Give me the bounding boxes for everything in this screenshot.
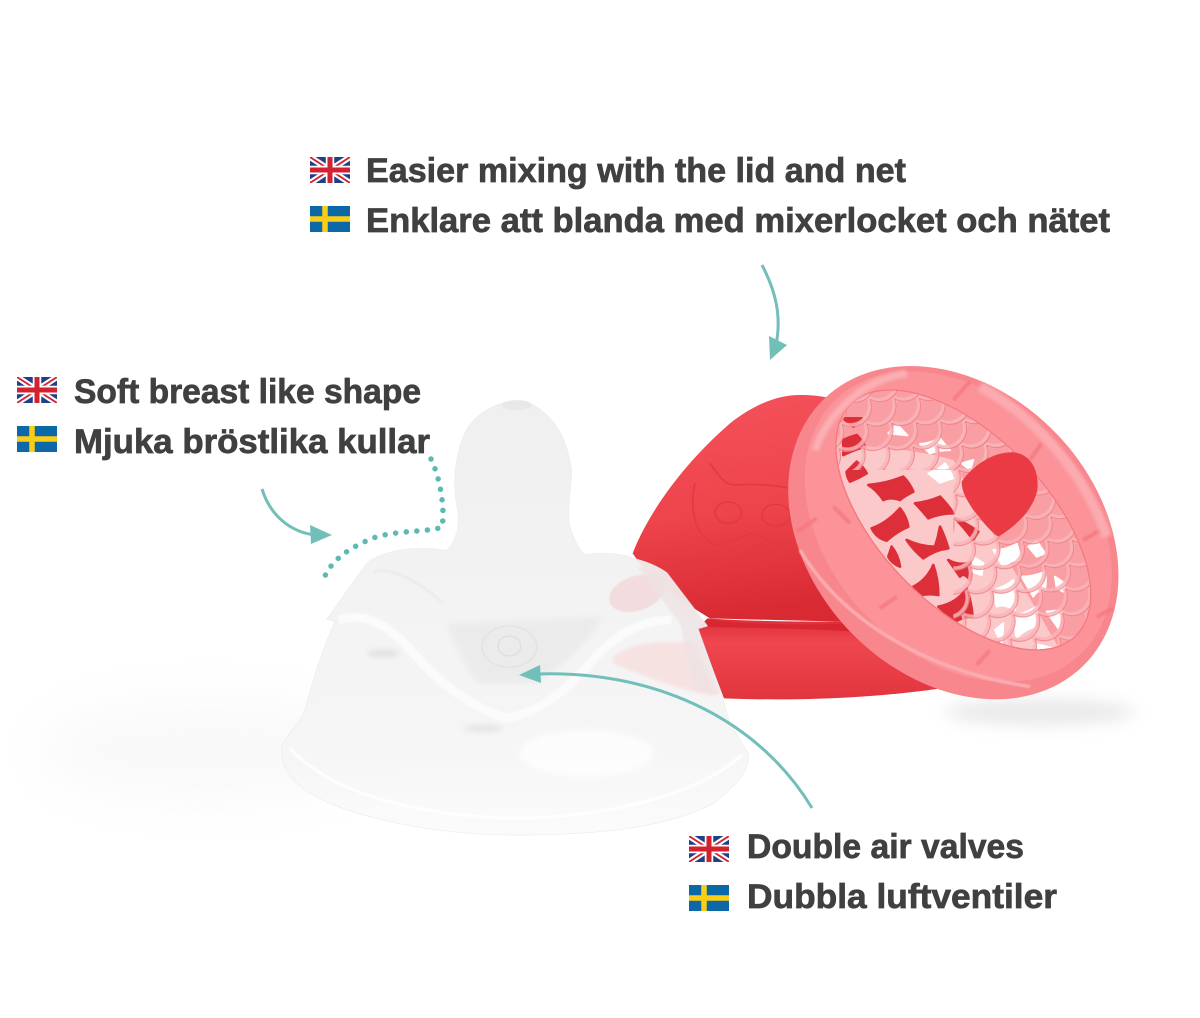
Swedish text: mixing: Enklare att blanda med mixerlocket och nätet (366, 202, 1110, 240)
label: mixing lid and net (310, 152, 1110, 240)
scaled net ribs (953, 416, 1090, 650)
icon: Swedish flag (17, 426, 57, 452)
English text: valves: Double air valves (747, 828, 1024, 866)
arrow: to breast like shape (262, 489, 332, 544)
embossed logo on lid (693, 463, 793, 547)
product: clear silicone teat (281, 400, 749, 835)
label: breast like shape (17, 373, 430, 461)
icon: UK flag (310, 157, 350, 183)
net handle tab (962, 452, 1038, 537)
label: double air valves (689, 828, 1057, 916)
English text: mixing: Easier mixing with the lid and net (366, 152, 906, 190)
net ring (721, 300, 1185, 766)
English text: shape: Soft breast like shape (74, 373, 421, 411)
icon: UK flag (17, 377, 57, 403)
net mesh (836, 390, 1090, 650)
teat details (290, 401, 742, 818)
icon: Swedish flag (310, 206, 350, 232)
red dome lid (633, 395, 940, 699)
Swedish text: valves: Dubbla luftventiler (747, 878, 1057, 916)
background soft shadows (40, 699, 1135, 800)
dotted outline: breast like shape (323, 459, 443, 581)
white mesh holes (888, 424, 1065, 655)
product: red mixing lid and net (632, 366, 1118, 700)
arrow: to mixing lid (762, 265, 787, 360)
Swedish text: shape: Mjuka bröstlika kullar (74, 423, 430, 461)
icon: UK flag (689, 836, 729, 862)
teat body (281, 400, 749, 835)
icon: Swedish flag (689, 885, 729, 911)
dark mesh holes (843, 418, 978, 622)
infographic canvas (17, 156, 1128, 911)
arrow: to double air valves (519, 665, 812, 808)
